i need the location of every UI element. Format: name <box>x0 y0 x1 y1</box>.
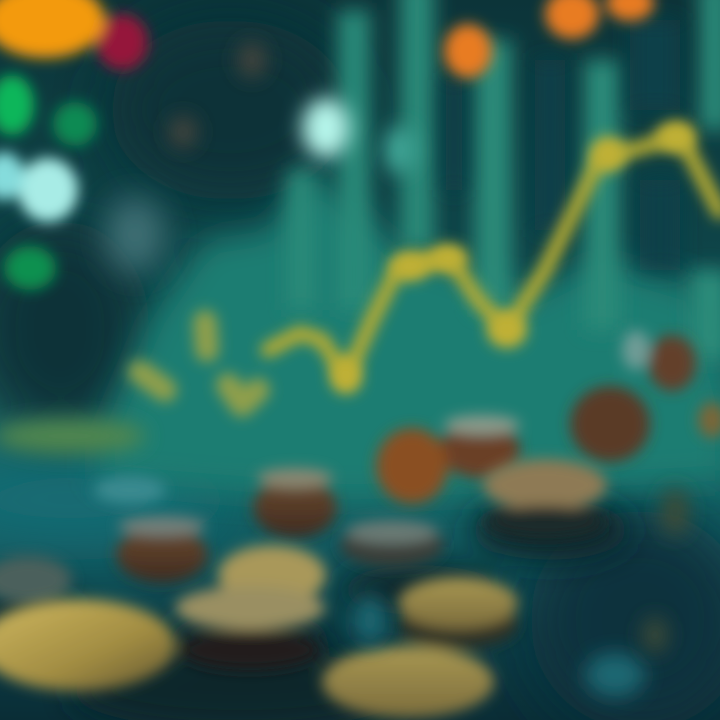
teal glints <box>354 596 645 697</box>
cyan markers <box>0 152 78 222</box>
faint brown dots <box>169 42 266 148</box>
gold coins <box>0 459 607 718</box>
glowing lights <box>302 0 654 174</box>
dark shadow under coins <box>0 500 630 720</box>
yellow line chart <box>140 135 720 405</box>
green bar columns <box>288 0 720 360</box>
green markers <box>0 75 97 290</box>
pale cyan light <box>302 98 350 158</box>
grey haze <box>105 197 165 273</box>
soft teal light <box>384 126 416 174</box>
coin pile <box>0 330 720 720</box>
flat grey coins <box>0 476 444 604</box>
left glowing markers <box>0 0 266 290</box>
faint amber glints <box>643 488 689 653</box>
chart line nodes <box>330 121 696 394</box>
teal mountain area chart <box>100 170 720 500</box>
dark gaps between bars <box>445 20 680 270</box>
orange lights <box>444 0 654 78</box>
orange and red highlight <box>0 0 148 70</box>
stacked brown coins <box>116 330 720 583</box>
faint olive baseline <box>0 418 146 454</box>
